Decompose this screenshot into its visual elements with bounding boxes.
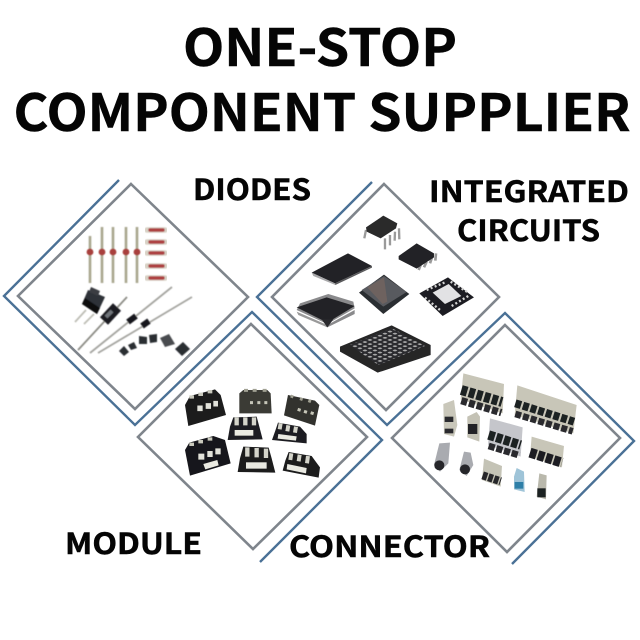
icon: grey round jack one: [434, 443, 450, 472]
panel: module: [138, 324, 367, 549]
icon: bridge rectifier: [75, 287, 105, 324]
title: COMPONENT SUPPLIER: [14, 72, 630, 146]
icon: small module centre: [228, 417, 263, 440]
icon: module top centre: [239, 390, 272, 413]
panel: connector: [392, 325, 620, 552]
icon: module top right: [284, 395, 319, 426]
icon: SOIC chip: [399, 243, 436, 270]
icon: three port jack: [482, 459, 502, 487]
label: integrated circuits: [429, 169, 629, 250]
icon: surface mount diodes: [119, 334, 190, 356]
title: [14, 7, 630, 146]
icon: large module top left: [185, 389, 226, 426]
icon: small module right: [272, 423, 307, 443]
icon: large module bottom left: [185, 436, 231, 476]
icon: single vertical jack: [467, 412, 480, 442]
icon: four port jack: [530, 437, 564, 467]
label: diodes: DIODES: [193, 167, 311, 209]
icon: blue jack: [514, 468, 525, 492]
icon: BGA chip: [340, 325, 431, 373]
icon: six port jack: [461, 373, 504, 413]
icon: four port jack silver: [488, 418, 523, 457]
label: module: MODULE: [65, 521, 202, 563]
icon: flat chip: [312, 253, 372, 285]
icon: small grey jack: [537, 473, 547, 499]
icon: QFP chip: [297, 294, 355, 327]
icon: small module bottom right: [283, 452, 320, 478]
title: ONE-STOP: [183, 7, 457, 81]
icon: axial diode row: [87, 227, 140, 283]
panel: integrated circuits: [272, 184, 499, 410]
label: integrated circuits: CIRCUITS: [457, 208, 600, 250]
icon: grey round jack two: [459, 452, 473, 476]
panel: diodes: [18, 184, 248, 409]
frame: integrated circuits outer line: [257, 182, 634, 564]
icon: large axial diode: [78, 297, 127, 350]
frame: diodes outer line: [4, 180, 382, 562]
icon: red glass diodes: [147, 230, 165, 278]
icon: PLCC chip: [359, 275, 409, 314]
icon: DIP chip: [364, 216, 399, 249]
icon: eight port jack: [515, 385, 577, 433]
label: connector: CONNECTOR: [289, 524, 490, 566]
label: integrated circuits: INTEGRATED: [429, 169, 629, 211]
icon: small module bottom centre: [238, 447, 275, 473]
icon: QFN chip: [419, 277, 474, 316]
icon: thin axial diodes: [90, 287, 192, 353]
icon: dual vertical jack: [443, 400, 457, 437]
